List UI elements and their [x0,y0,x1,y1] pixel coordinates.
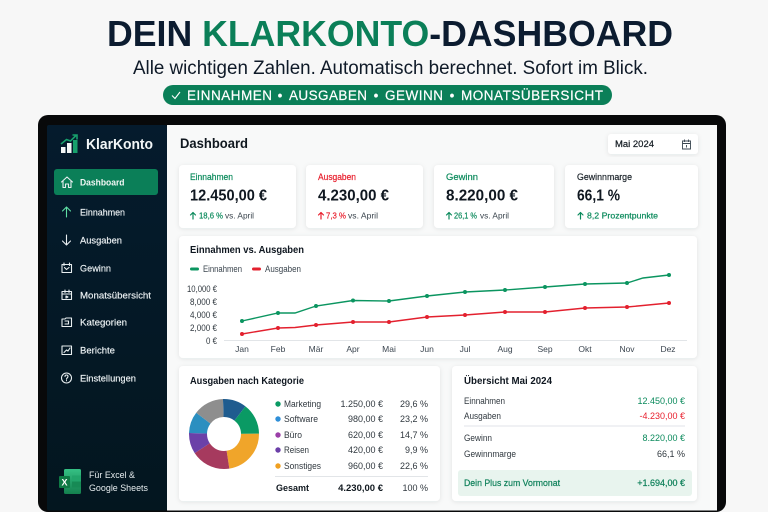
KPI card: Ausgaben [306,165,423,228]
callout: Plus zum Vormonat: +1.694,00 € [637,478,685,488]
category row: Software: 980,00 € [348,414,383,424]
x axis labels: Sep [537,344,553,354]
row: Einnahmen: Einnahmen [464,396,505,406]
pill text: AUSGABEN [289,88,367,103]
category row: Reisen [275,445,428,455]
nav item: Gewinn [62,263,111,274]
nav label: Dashboard [80,178,125,188]
panel heading: Übersicht Mai 2024 [464,374,552,387]
KPI card: Ausgaben: 4.230,00 € [318,188,389,204]
KPI card: Gewinn: Gewinn [446,172,478,182]
y axis labels: 2,000 € [190,323,217,333]
x axis labels: Nov [619,344,635,354]
total row: 100 % [402,483,428,493]
row: Ausgaben: -4.230,00 € [639,411,685,421]
row: Ausgaben: Ausgaben [464,411,501,421]
callout: Plus zum Vormonat [458,470,692,496]
category row: Software: 23,2 % [400,414,428,424]
sidebar footer text: Google Sheets [89,483,148,493]
x axis labels: Jul [460,344,471,354]
y axis labels: 0 € [206,336,217,346]
sidebar footer text [89,470,148,493]
KPI card: Einnahmen: vs. April [225,210,254,220]
main content background [167,125,717,510]
chart legend: Ausgaben [265,264,301,274]
KPI card: Gewinn: 26,1 % [454,210,477,220]
KPI card: Gewinn: 8.220,00 € [446,188,518,204]
category row: Sonstiges [275,461,428,471]
category row: Büro: Büro [284,430,302,440]
total row [276,483,428,494]
KPI card: Einnahmen [179,165,296,228]
nav item: Berichte [62,346,115,356]
date picker [608,134,698,154]
nav item: Ausgaben [62,235,122,246]
icon: calendar [682,140,690,149]
total row: Gesamt [276,483,309,493]
panel: Übersicht Mai 2024 [452,366,697,501]
icon: home [62,177,72,188]
category row: Büro: 14,7 % [400,430,428,440]
icon: check mark [172,92,180,98]
x axis labels: Jan [235,344,249,354]
y axis labels: 8,000 € [190,297,217,307]
category row: Sonstiges: 22,6 % [400,461,428,471]
category row: Sonstiges: Sonstiges [284,461,321,471]
pill text: GEWINN [385,88,443,103]
category row: Reisen: Reisen [284,445,309,455]
panel heading: Ausgaben nach Kategorie [190,375,304,387]
sidebar [47,125,167,510]
KPI card: Gewinnmarge: Gewinnmarge [577,172,632,182]
nav item: Kategorien: Kategorien [80,318,127,328]
x axis labels: Jun [420,344,434,354]
category row: Marketing: 1.250,00 € [340,399,383,409]
row: Einnahmen: 12.450,00 € [637,396,685,406]
KPI card: Ausgaben: 7,3 % [326,210,346,220]
icon: KlarKonto logo [61,135,78,153]
panel: Ausgaben nach Kategorie [179,366,440,501]
category row: Marketing: Marketing [284,399,321,409]
sidebar footer text: Für Excel & [89,470,135,480]
line series: Einnahmen [240,273,671,323]
x axis labels: Mär [309,344,323,354]
row: Gewinn [464,433,685,443]
KPI card: Einnahmen: Einnahmen [190,172,233,182]
icon: Excel: X [62,478,68,488]
chart heading: Einnahmen vs. Ausgaben [190,244,304,256]
pill text: • [278,88,283,103]
category row: Büro: 620,00 € [348,430,383,440]
navigation active item [54,169,158,195]
y axis labels: 10,000 € [187,284,217,294]
title: DEIN KLARKONTO-DASHBOARD [107,13,673,54]
pill text [187,88,603,103]
nav item: Einnahmen: Einnahmen [80,208,125,218]
laptop frame [38,115,726,512]
x axis labels [235,344,676,354]
KPI card: Einnahmen: 18,6 % [199,210,223,220]
nav item: Monatsübersicht: Monatsübersicht [80,290,151,302]
row: Ausgaben [464,411,685,421]
subtitle: Alle wichtigen Zahlen. Automatisch berechnet. Sofort im Blick. [133,58,648,79]
row: Gewinnmarge [464,449,685,459]
x axis labels: Okt [578,344,592,354]
category row: Reisen: 9,9 % [405,445,428,455]
row: Gewinn: 8.220,00 € [642,433,685,443]
chart legend: Einnahmen [203,264,242,274]
page heading: Dashboard [180,135,248,151]
KPI card: Gewinnmarge: 8,2 Prozentpunkte [587,210,658,220]
category row: Marketing [275,399,428,409]
KPI card: Gewinn [434,165,554,228]
nav item: Berichte: Berichte [80,346,115,356]
feature pill [163,85,612,105]
icon: Excel [59,469,81,494]
category row: Software [275,414,428,424]
date picker: Mai 2024 [615,139,654,150]
x axis labels: Aug [497,344,513,354]
nav item: Einnahmen [62,207,125,218]
KPI card: Gewinnmarge: 66,1 % [577,188,620,204]
pill text: • [450,88,455,103]
KPI card: Ausgaben: vs. April [348,210,378,220]
y axis labels: 4,000 € [190,310,217,320]
donut chart [198,408,250,460]
brand name: KlarKonto [86,136,153,153]
pill text: • [374,88,379,103]
x axis labels: Feb [271,344,286,354]
KPI card: Gewinn: vs. April [480,210,509,220]
row: Gewinnmarge: Gewinnmarge [464,449,516,459]
row: Gewinnmarge: 66,1 % [657,449,685,459]
row: Gewinn: Gewinn [464,433,492,443]
chart legend [190,264,301,274]
y axis labels [187,284,217,346]
KPI card: Einnahmen: 12.450,00 € [190,188,267,204]
nav item: Ausgaben: Ausgaben [80,236,122,246]
panel: line chart card [179,236,697,358]
x axis labels: Mai [382,344,396,354]
KPI card: Ausgaben: Ausgaben [318,172,356,182]
category row: Büro [275,430,428,440]
category row: Software: Software [284,414,318,424]
line series: Ausgaben [240,301,671,336]
nav item: Einstellungen: Einstellungen [80,374,136,384]
row: Einnahmen [464,396,685,406]
KPI card: Gewinnmarge [565,165,698,228]
x axis labels: Dez [660,344,676,354]
pill text: EINNAHMEN [187,88,272,103]
category row: Reisen: 420,00 € [348,445,383,455]
callout: Plus zum Vormonat: Dein Plus zum Vormonat [464,478,560,488]
category row: Marketing: 29,6 % [400,399,428,409]
category row: Sonstiges: 960,00 € [348,461,383,471]
nav item: Gewinn: Gewinn [80,264,111,274]
pill text: MONATSÜBERSICHT [461,88,603,103]
total row: 4.230,00 € [338,483,384,494]
x axis labels: Apr [346,344,360,354]
navigation list [62,207,151,384]
